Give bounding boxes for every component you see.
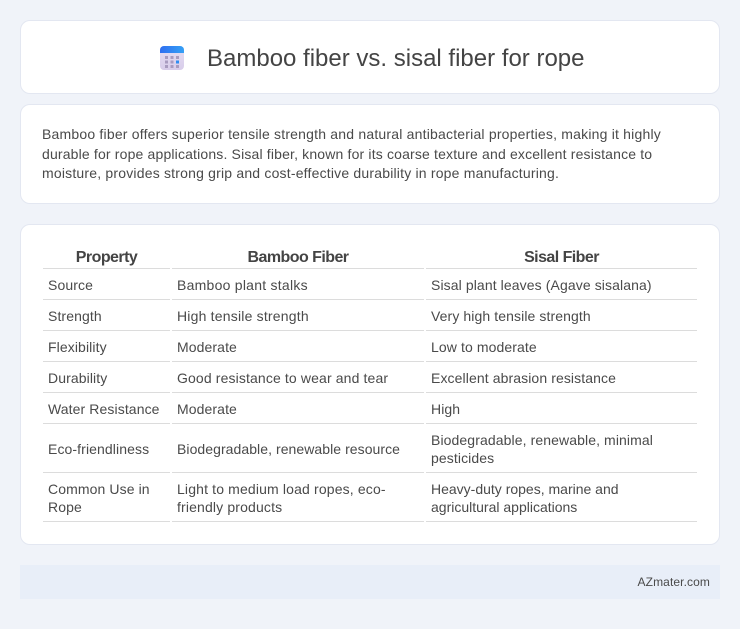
- row: strength: Very high tensile strength: [431, 308, 591, 324]
- row: strength: [48, 308, 591, 324]
- table header: Bamboo Fiber: [248, 249, 348, 266]
- row: common use in rope: agricultural applications: [431, 499, 577, 515]
- row: source: Bamboo plant stalks: [177, 277, 308, 293]
- row: source: [48, 277, 652, 293]
- row: water resistance: Moderate: [177, 401, 237, 417]
- description text: moisture, provides strong grip and cost-effective durability in rope manufacturing.: [42, 165, 559, 181]
- row: source: Source: [48, 277, 93, 293]
- row: common use in rope: Common Use in: [48, 481, 150, 497]
- row: eco-friendliness: [48, 432, 653, 466]
- row: water resistance: Water Resistance: [48, 401, 160, 417]
- row: durability: [48, 370, 616, 386]
- row: eco-friendliness: pesticides: [431, 450, 494, 466]
- row: common use in rope: Heavy-duty ropes, marine and: [431, 481, 619, 497]
- row: common use in rope: friendly products: [177, 499, 282, 515]
- row: common use in rope: [48, 481, 619, 515]
- row: durability: Excellent abrasion resistance: [431, 370, 616, 386]
- footer bar: [20, 565, 720, 599]
- description text: Bamboo fiber offers superior tensile strength and natural antibacterial properties, making it highly: [42, 126, 661, 142]
- row: flexibility: [48, 339, 537, 355]
- row: flexibility: Moderate: [177, 339, 237, 355]
- table header: Property: [76, 249, 137, 266]
- row: eco-friendliness: Biodegradable, renewable resource: [177, 441, 400, 457]
- row: common use in rope: Light to medium load ropes, eco-: [177, 481, 386, 497]
- row: flexibility: Low to moderate: [431, 339, 537, 355]
- row: source: Sisal plant leaves (Agave sisalana): [431, 277, 652, 293]
- description text: durable for rope applications. Sisal fiber, known for its coarse texture and excellent resistance to: [42, 146, 652, 162]
- row: water resistance: [48, 401, 460, 417]
- row: durability: Good resistance to wear and tear: [177, 370, 388, 386]
- row: water resistance: High: [431, 401, 460, 417]
- row: strength: High tensile strength: [177, 308, 309, 324]
- table header: Sisal Fiber: [524, 249, 599, 266]
- description text: [42, 126, 661, 181]
- row: eco-friendliness: Eco-friendliness: [48, 441, 149, 457]
- row: eco-friendliness: Biodegradable, renewable, minimal: [431, 432, 653, 448]
- footer credit: AZmater.com: [638, 575, 710, 589]
- panel: description: [20, 104, 720, 204]
- title text: Bamboo fiber vs. sisal fiber for rope: [207, 45, 584, 72]
- row: flexibility: Flexibility: [48, 339, 107, 355]
- row: strength: Strength: [48, 308, 102, 324]
- row: durability: Durability: [48, 370, 107, 386]
- row: common use in rope: Rope: [48, 499, 82, 515]
- icon: calendar: [160, 46, 184, 70]
- table header: [76, 249, 600, 266]
- panel: comparison table: [20, 224, 720, 545]
- panel: title: [20, 20, 720, 94]
